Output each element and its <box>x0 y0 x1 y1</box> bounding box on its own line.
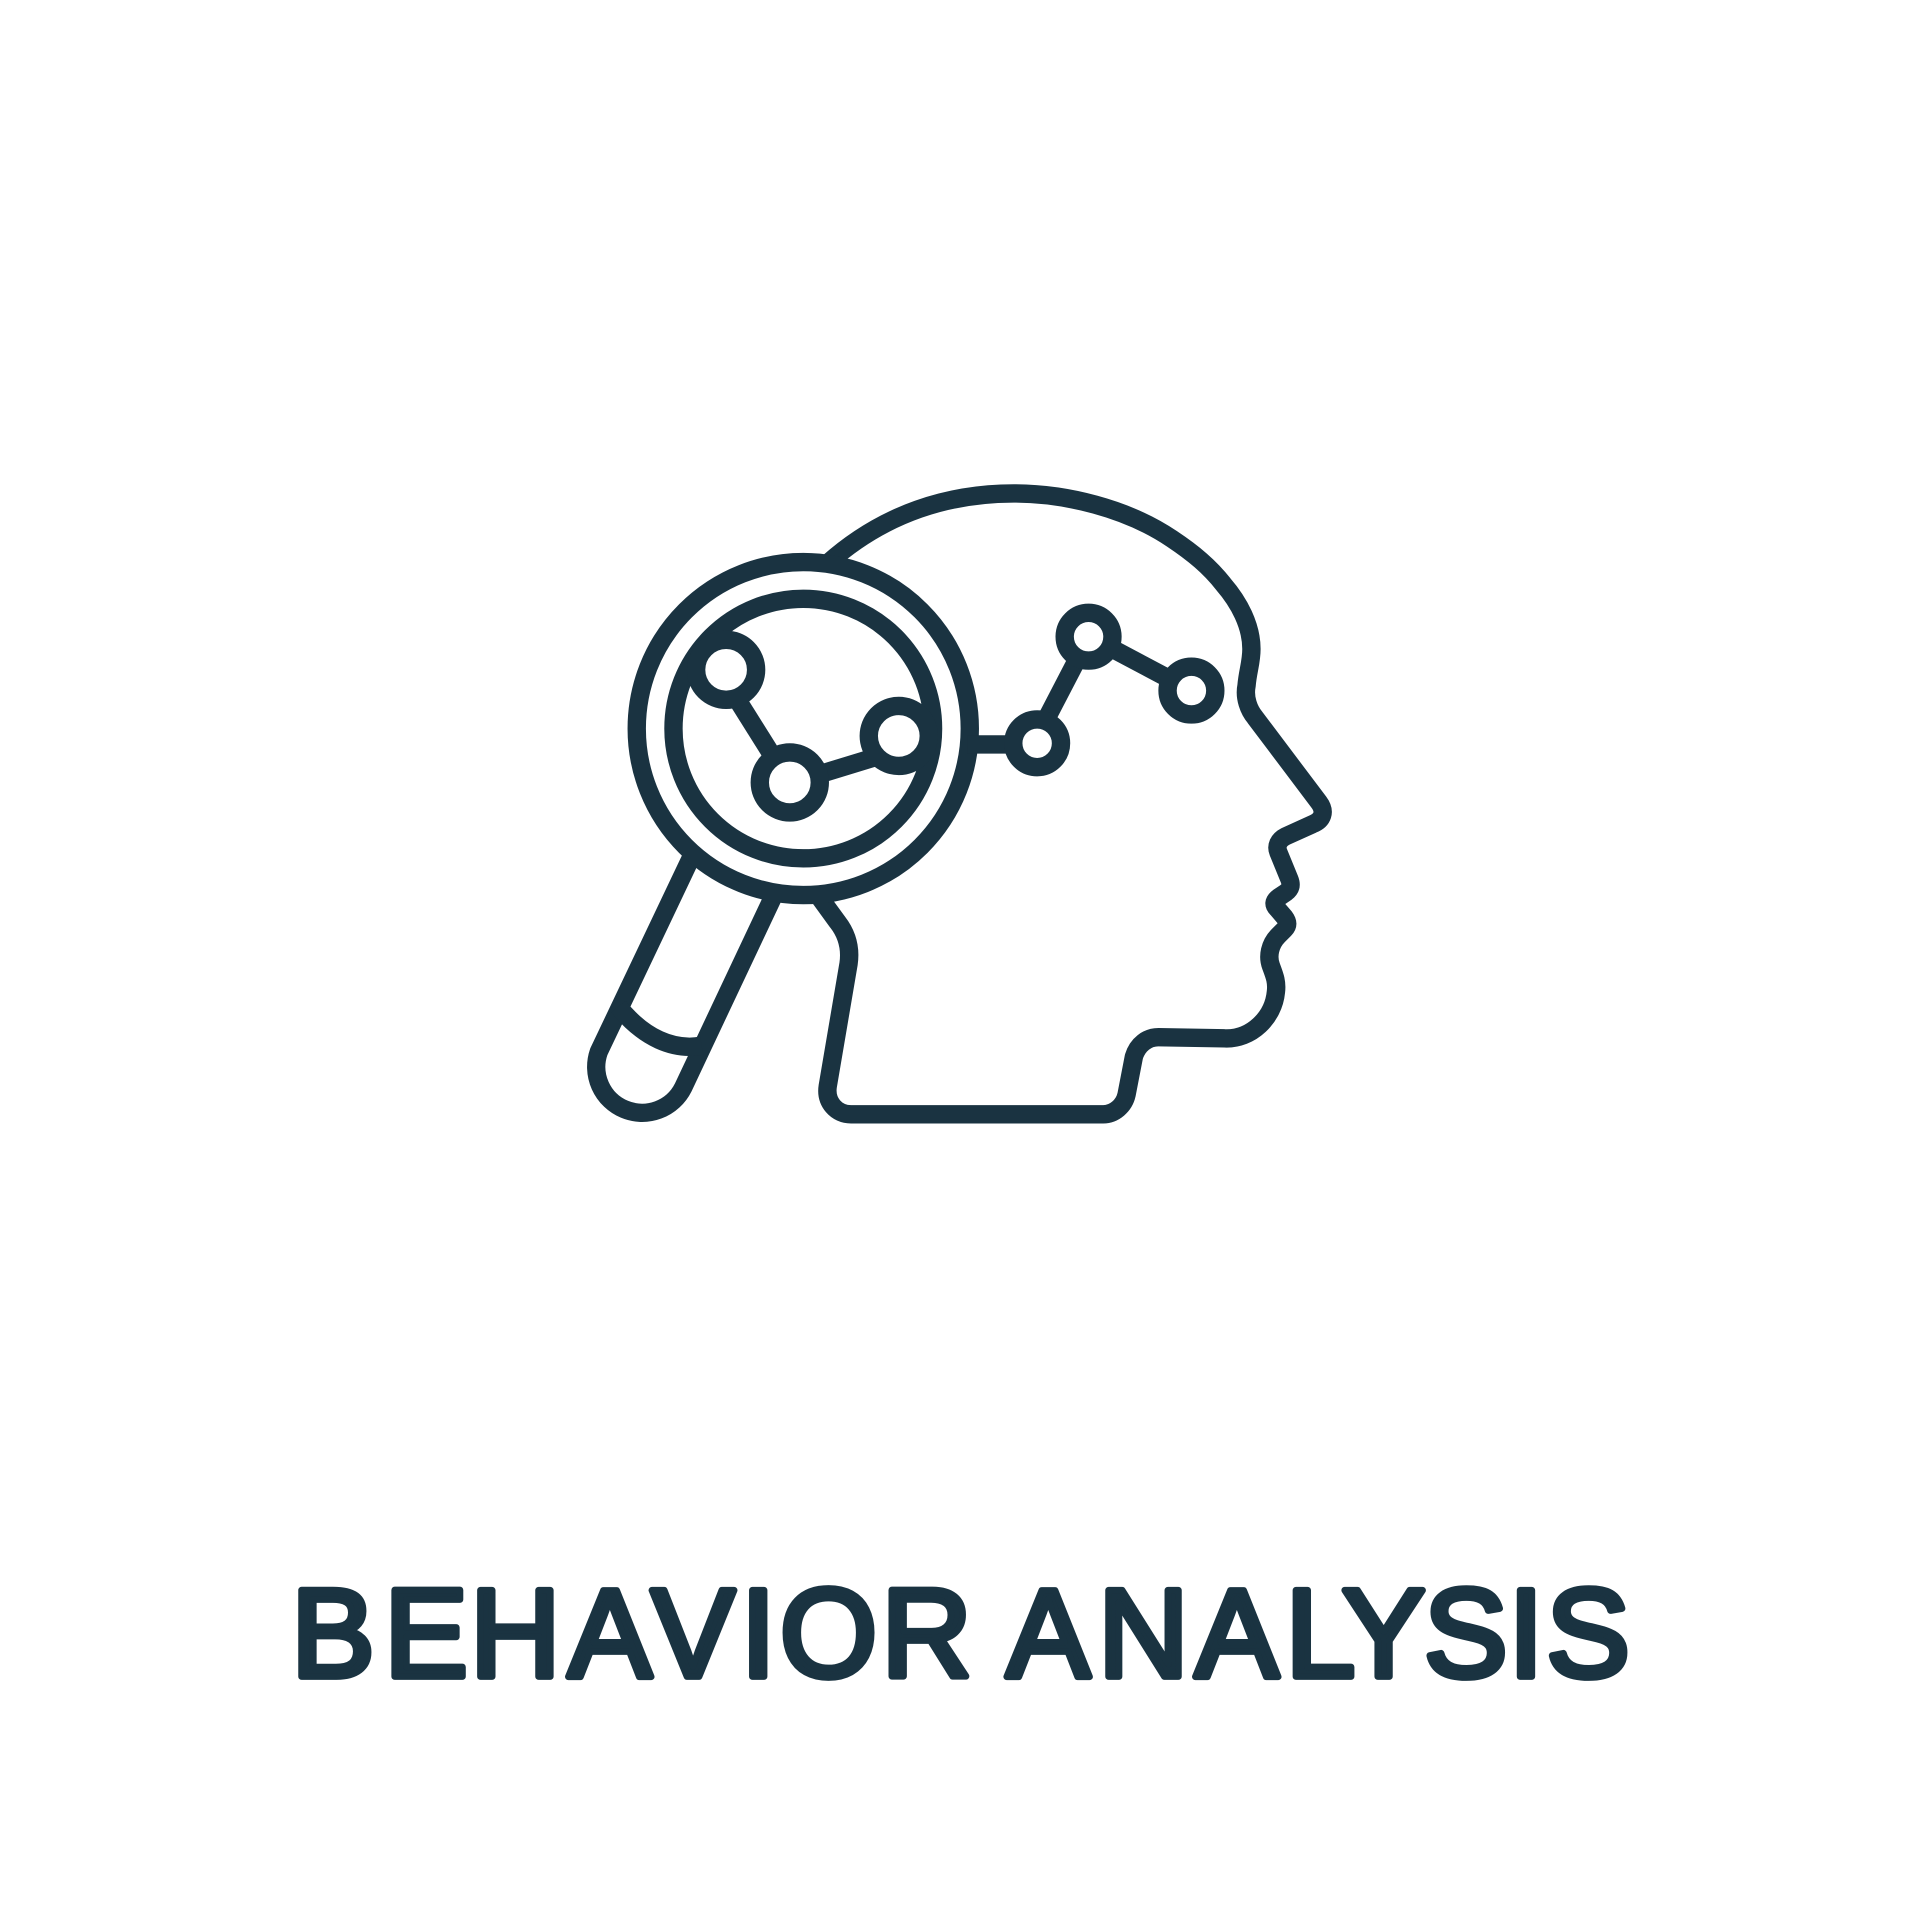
icon: head profile outline <box>818 493 1323 1114</box>
icon: magnifier handle <box>596 853 775 1113</box>
icon: magnifier inner lens <box>673 599 933 858</box>
chart: data nodes inside head <box>1013 613 1215 767</box>
title: BEHAVIOR ANALYSIS <box>291 1564 1630 1703</box>
chart: connected line links <box>735 647 1171 775</box>
icon: behavior analysis head with magnifier <box>596 493 1323 1114</box>
chart: data nodes inside lens <box>696 640 929 812</box>
icon: magnifier outer ring <box>637 562 970 895</box>
